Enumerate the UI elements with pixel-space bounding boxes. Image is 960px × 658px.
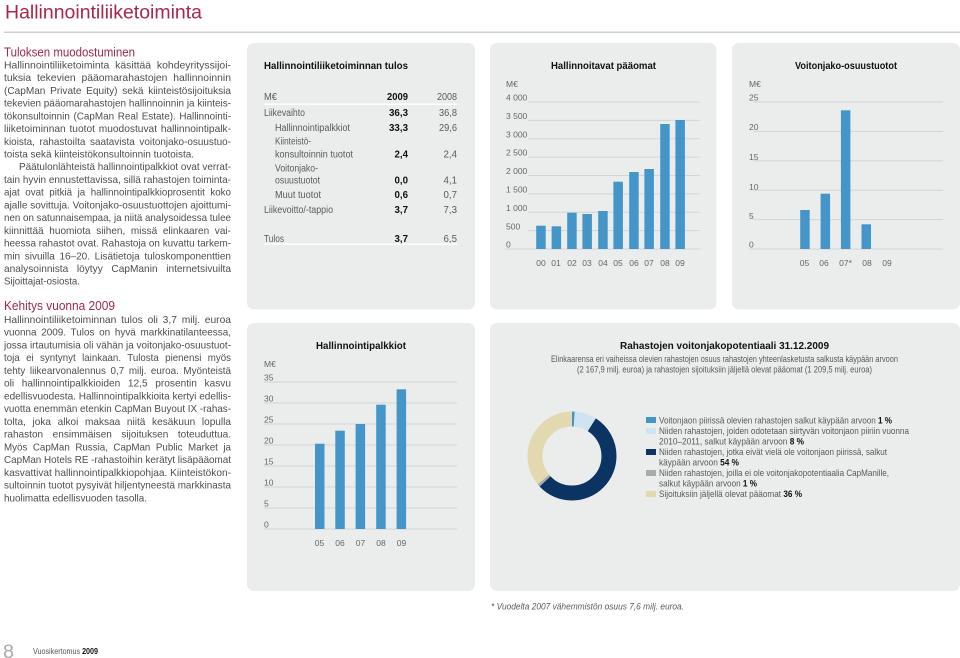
x axis labels: 07 — [644, 258, 654, 268]
table heading: Hallinnointiliiketoiminnan tulos — [264, 60, 408, 72]
text block: Tuloksen muodostuminen second paragraph: ajat ovat pitkiä ja hallinnointipalkkioprosentit koko — [4, 187, 231, 199]
page title: Hallinnointiliiketoiminta — [5, 2, 202, 24]
panel: Voitonjako-osuustuotot chart — [732, 43, 960, 310]
table rows: osuustuotot — [275, 176, 320, 186]
table rows: 3,7 — [394, 205, 408, 216]
y axis labels: 5 — [264, 498, 269, 508]
x axis labels — [536, 258, 685, 268]
text block: Tuloksen muodostuminen first paragraph: (CapMan Private Equity) sekä kiinteistösijoituksia — [4, 85, 231, 97]
panel description — [551, 354, 898, 375]
legend: Niiden rahastojen, jotka eivät vielä ole voitonjaon piirissä, salkut — [659, 447, 887, 457]
legend: salkut käypään arvoon 1 % — [659, 478, 758, 488]
text block: Kehitys vuonna 2009: sultoinnin tuotot pysyivät hiljentyneestä markkinasta — [4, 480, 231, 492]
text block: Kehitys vuonna 2009: vuotta enemmän etenkin CapMan Buyout IX -rahas- — [4, 403, 231, 415]
x axis labels: 07 — [356, 538, 365, 548]
text block: Kehitys vuonna 2009: toja ei syntynyt lainkaan. Tulosta pienensi myös — [4, 352, 231, 364]
table rows: Kiinteistö- — [275, 136, 311, 148]
text block: Kehitys vuonna 2009: rahaston ensimmäisen sijoituksen toteuduttua. — [4, 429, 231, 441]
x axis labels: 02 — [567, 258, 577, 268]
x axis labels: 09 — [675, 258, 685, 268]
x axis labels: 05 — [800, 258, 809, 268]
table rows: Tulos — [264, 234, 284, 245]
text block: Tuloksen muodostuminen second paragraph: tain hyvin ennustettavissa, sillä rahastojen toiminta- — [4, 174, 231, 186]
y axis labels: 4 000 — [506, 92, 528, 102]
text block: Tuloksen muodostuminen first paragraph: tökonsultoinnin (CapMan Real Estate). Hallinnointi- — [4, 110, 231, 122]
y axis labels: 10 — [264, 478, 274, 488]
table rows: 6,5 — [444, 234, 457, 245]
text block: Kehitys vuonna 2009: edellisvuodesta. Hallinnointipalkkioita kertyi edellis- — [4, 390, 231, 402]
text block: Kehitys vuonna 2009: tehty liikearvonalennus 0,7 milj. euroa. Myönteistä — [4, 365, 231, 377]
y axis labels: M€ — [264, 359, 276, 369]
y axis labels: 1 000 — [506, 203, 528, 213]
y axis labels: 25 — [264, 414, 274, 424]
text block: Tuloksen muodostuminen second paragraph: nen on satunnaisempaa, ja niitä analysoidessa tulee — [4, 212, 231, 224]
x axis labels: 09 — [882, 258, 892, 268]
table rows: konsultoinnin tuotot — [275, 150, 353, 160]
panel description: (2 167,9 milj. euroa) ja rahastojen sijoituksiin jäljellä olevat pääomat (1 209,5 milj. euroa) — [577, 365, 872, 375]
y axis labels: 25 — [749, 92, 759, 102]
table rows: M€ — [264, 92, 277, 103]
legend: Voitonjaon piirissä olevien rahastojen salkut käypään arvoon 1 % — [659, 416, 893, 426]
x axis labels: 03 — [582, 258, 592, 268]
legend: 2010–2011, salkut käypään arvoon 8 % — [659, 436, 805, 446]
text block: Tuloksen muodostuminen second paragraph: analysoinnista löytyy CapManin internetsivuilta — [4, 263, 231, 275]
text block: Tuloksen muodostuminen first paragraph: liiketoiminnan tuotot muodostuvat hallinnointipalk- — [4, 123, 231, 135]
table rows: 2,4 — [444, 150, 457, 160]
text block: Kehitys vuonna 2009: tolta, joka alkoi maksaa niitä kesäkuun lopulla — [4, 416, 231, 428]
text block: Kehitys vuonna 2009: CapMan Hotels RE -rahastoihin kerätyt lisäpääomat — [4, 454, 231, 466]
y axis labels: 0 — [264, 520, 269, 530]
text block: Tuloksen muodostuminen first paragraph: Hallinnointiliiketoiminta käsittää kohdeyrityssijoi- — [4, 60, 231, 72]
y axis labels: M€ — [749, 79, 761, 89]
y axis labels: 500 — [506, 221, 520, 231]
x axis labels: 00 — [536, 258, 546, 268]
y axis labels: 2 000 — [506, 166, 528, 176]
footnote: * Vuodelta 2007 vähemmistön osuus 7,6 milj. euroa. — [491, 602, 684, 612]
text block: Kehitys vuonna 2009: kasvattivat hallinnointipalkkiopohjaa. Kiinteistökon- — [4, 467, 231, 479]
x axis labels: 07* — [839, 258, 853, 268]
text block: Kehitys vuonna 2009: vuonna 2009. Tulos on hyvä markkinatilanteessa, — [4, 327, 231, 339]
text block: Kehitys vuonna 2009 — [3, 314, 231, 504]
x axis labels: 04 — [598, 258, 608, 268]
legend: Niiden rahastojen, joiden odotetaan siirtyvän voitonjaon piiriin vuonna — [659, 426, 910, 436]
y axis labels: 2 500 — [506, 148, 528, 158]
panel: Rahastojen voitonjakopotentiaali — [490, 323, 960, 591]
heading: Tuloksen muodostuminen: Tuloksen muodostuminen — [4, 46, 135, 60]
x axis labels: 06 — [819, 258, 829, 268]
x axis labels: 05 — [315, 538, 324, 548]
bars — [315, 389, 406, 529]
x axis labels: 08 — [660, 258, 670, 268]
table rows: 33,3 — [389, 123, 408, 134]
y axis labels: 3 500 — [506, 111, 528, 121]
y axis labels: 15 — [264, 456, 274, 466]
bars — [800, 110, 871, 249]
text block: Tuloksen muodostuminen second paragraph: kiinnittää huomiota siihen, missä elinkaaren vai- — [4, 225, 231, 237]
panel: Hallinnoitavat pääomat chart — [490, 43, 716, 310]
y axis labels — [506, 79, 528, 250]
table rows: Muut tuotot — [275, 190, 321, 201]
panel: Hallinnointiliiketoiminnan tulos table — [247, 43, 475, 310]
chart heading: Hallinnoitavat pääomat — [551, 60, 656, 72]
y axis labels: 5 — [749, 211, 754, 221]
text block: Tuloksen muodostuminen second paragraph: min sivuilla 16–20. Lisätietoja tuloskomponenttien — [4, 250, 231, 262]
x axis labels — [315, 538, 406, 548]
x axis labels — [800, 258, 892, 268]
table rows: 0,0 — [394, 176, 408, 186]
y axis labels: 1 500 — [506, 184, 528, 194]
chart heading: Hallinnointipalkkiot — [316, 340, 406, 352]
table rows — [264, 92, 457, 245]
text block: Kehitys vuonna 2009: huolimatta edellisvuoden tasolla. — [4, 492, 147, 504]
table rows: 36,3 — [389, 108, 408, 119]
text block: Tuloksen muodostuminen second paragraph: ajalle sovittuja. Voitonjako-osuustuottojen ajoittumi- — [4, 199, 231, 211]
table rows: 29,6 — [439, 123, 457, 134]
text block: Kehitys vuonna 2009: oli hallinnointipalkkioiden 12,5 prosentin kasvu — [4, 378, 231, 390]
panel: Hallinnointipalkkiot chart — [247, 323, 475, 591]
y axis labels: 30 — [264, 394, 274, 404]
panel description: Elinkaarensa eri vaiheissa olevien rahastojen osuus rahastojen yhteenlasketusta salkusta käypään arvoon — [551, 354, 898, 364]
legend: Sijoituksiin jäljellä olevat pääomat 36 % — [659, 489, 803, 499]
bars — [536, 120, 685, 249]
table rows: 2008 — [437, 92, 457, 103]
text block: Kehitys vuonna 2009: jossa irtautumisia oli vähän ja voitonjako-osuustuot- — [3, 340, 231, 352]
text block: Tuloksen muodostuminen first paragraph — [4, 60, 231, 160]
text block: Tuloksen muodostuminen second paragraph: Sijoittajat-osiosta. — [4, 276, 80, 288]
chart heading: Voitonjako-osuustuotot — [795, 60, 897, 72]
y axis labels: 0 — [506, 240, 511, 250]
panel heading: Rahastojen voitonjakopotentiaali 31.12.2009 — [620, 340, 829, 352]
text block: Kehitys vuonna 2009: Myös CapMan Russia, CapMan Public Market ja — [4, 441, 231, 453]
x axis labels: 06 — [629, 258, 639, 268]
y axis labels: 15 — [749, 152, 759, 162]
y axis labels: 35 — [264, 372, 274, 382]
table rows: 2009 — [387, 92, 408, 103]
x axis labels: 08 — [862, 258, 872, 268]
y axis labels: 20 — [264, 436, 274, 446]
table rows: Voitonjako- — [275, 164, 318, 174]
y axis labels: M€ — [506, 79, 518, 89]
x axis labels: 08 — [376, 538, 386, 548]
text block: Tuloksen muodostuminen first paragraph: tuksia tekevien pääomarahastojen hallinnoinnin — [4, 72, 231, 84]
y axis labels: 3 000 — [506, 129, 528, 139]
text block: Tuloksen muodostuminen second paragraph: heessa rahastot ovat. Rahastoja on kuvattu tarkem- — [4, 238, 231, 250]
x axis labels: 06 — [335, 538, 345, 548]
table rows: 0,7 — [444, 190, 457, 201]
legend — [646, 416, 910, 499]
table rows: 4,1 — [444, 176, 457, 186]
table rows: 3,7 — [394, 234, 408, 245]
x axis labels: 09 — [397, 538, 406, 548]
y axis labels — [749, 79, 761, 250]
footer: report name: Vuosikertomus 2009 — [33, 647, 98, 656]
y axis labels: 20 — [749, 122, 759, 132]
text block: Tuloksen muodostuminen first paragraph: tekevien pääomarahastojen hallinnoinnin ja kiinteis- — [4, 98, 231, 110]
y axis labels — [264, 359, 276, 530]
donut chart — [535, 419, 609, 493]
table rows: Liikevoitto/-tappio — [264, 205, 333, 216]
text block: Tuloksen muodostuminen first paragraph: kioista, rahastoilta saatavista voitonjako-osuustuo- — [4, 136, 231, 148]
x axis labels: 05 — [613, 258, 623, 268]
table rows: Liikevaihto — [264, 108, 305, 119]
text block: Tuloksen muodostuminen second paragraph: Päätulonlähteistä hallinnointipalkkiot ovat verrat- — [19, 161, 231, 173]
table rows: 0,6 — [394, 190, 408, 201]
legend: käypään arvoon 54 % — [659, 458, 740, 468]
heading: Kehitys vuonna 2009: Kehitys vuonna 2009 — [4, 299, 115, 313]
table rows: 36,8 — [439, 108, 457, 119]
text block: Tuloksen muodostuminen first paragraph: toista sekä kiinteistökonsultoinnin tuotoista. — [4, 148, 194, 160]
text block: Tuloksen muodostuminen second paragraph — [4, 161, 231, 288]
table rows: 7,3 — [444, 205, 457, 216]
x axis labels: 01 — [551, 258, 561, 268]
y axis labels: 0 — [749, 240, 754, 250]
text block: Kehitys vuonna 2009: Hallinnointiliiketoiminnan tulos oli 3,7 milj. euroa — [4, 314, 231, 326]
table rows: 2,4 — [394, 150, 408, 160]
y axis labels: 10 — [749, 182, 759, 192]
legend: Niiden rahastojen, joilla ei ole voitonjakopotentiaalia CapManille, — [659, 468, 889, 478]
table rows: Hallinnointipalkkiot — [275, 123, 350, 134]
